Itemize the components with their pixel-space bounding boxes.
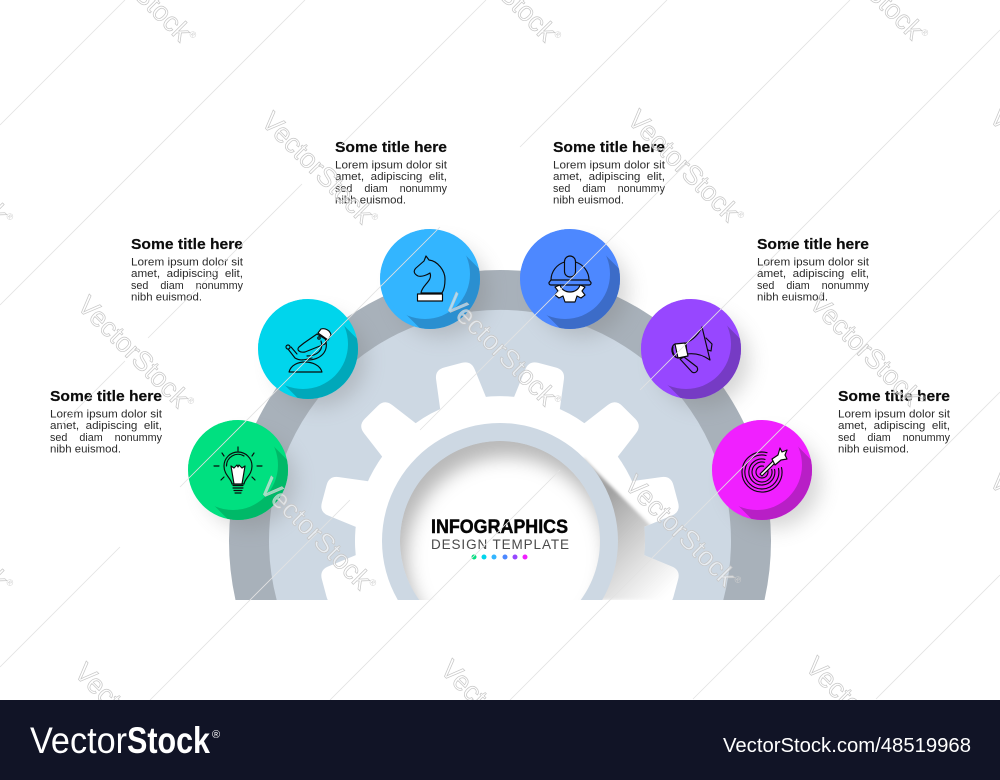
gear semicircle graphic [229, 270, 771, 600]
text block: step 6: amet, adipiscing elit, [838, 420, 950, 432]
text block: step 4: Lorem ipsum dolor sit [553, 160, 665, 172]
text block: step 2: Lorem ipsum dolor sit [131, 256, 243, 268]
text block: step 5 [757, 236, 870, 304]
light gear plate [269, 310, 731, 600]
watermark overlay: ® [187, 29, 199, 41]
watermark overlay: Vector [69, 657, 144, 732]
watermark overlay: ® [917, 393, 929, 405]
text block: step 3: Lorem ipsum dolor sit [335, 160, 447, 172]
watermark overlay: VectorStock [804, 288, 927, 411]
watermark overlay: ® [735, 209, 747, 221]
text block: step 3: amet, adipiscing elit, [335, 171, 447, 183]
text block: step 3: Some title here [335, 139, 447, 156]
watermark overlay: Vector [800, 651, 875, 726]
icon: chess knight [414, 256, 445, 301]
heading: INFOGRAPHICS [431, 517, 568, 538]
text block: step 4: Some title here [553, 139, 665, 156]
icon: hard hat and gear [549, 256, 591, 302]
centre ring [382, 423, 618, 600]
subheading: DESIGN TEMPLATE [431, 537, 569, 552]
text block: step 5: amet, adipiscing elit, [757, 268, 869, 280]
centre white disc with inner shadow [400, 441, 600, 600]
text block: step 1: amet, adipiscing elit, [50, 420, 162, 432]
text block: step 4: sed diam nonummy [553, 183, 666, 195]
watermark overlay: VectorStock [256, 106, 379, 229]
text block: step 1: Lorem ipsum dolor sit [50, 408, 162, 420]
step 6 badge: magenta [712, 420, 820, 528]
text block: step 1: nibh euismod. [50, 444, 121, 456]
watermark overlay: ® [367, 577, 379, 589]
icon: light bulb [214, 447, 262, 493]
watermark overlay: ® [4, 211, 16, 223]
text block: step 2: sed diam nonummy [131, 280, 244, 292]
text block: step 1: sed diam nonummy [50, 432, 163, 444]
centre title [431, 517, 569, 560]
text block: step 3: nibh euismod. [335, 194, 406, 206]
text block: step 6: Lorem ipsum dolor sit [838, 408, 950, 420]
footer logo: Vector [30, 720, 127, 761]
step 3 badge: sky blue [380, 229, 488, 337]
watermark overlay: ® [4, 577, 16, 589]
colour dots [472, 554, 528, 560]
text block: step 2 [131, 236, 244, 304]
text block: step 3 [335, 139, 448, 206]
watermark overlay: ® [552, 393, 564, 405]
icon: megaphone [672, 327, 712, 373]
footer bar [0, 700, 1000, 780]
text block: step 6: Some title here [838, 388, 950, 405]
watermark overlay: ® [732, 574, 744, 586]
step 1 badge: green [188, 420, 296, 528]
text block: step 4: nibh euismod. [553, 194, 624, 206]
watermark overlay: VectorStock [619, 469, 742, 592]
text block: step 5: sed diam nonummy [757, 280, 870, 292]
text block: step 2: nibh euismod. [131, 292, 202, 304]
text block: step 2: Some title here [131, 236, 243, 253]
footer logo [30, 720, 220, 761]
watermark overlay: VectorStock [622, 104, 745, 227]
footer logo: Stock [127, 720, 210, 761]
text block: step 5: nibh euismod. [757, 292, 828, 304]
text block: step 4: amet, adipiscing elit, [553, 171, 665, 183]
watermark overlay: ® [919, 27, 931, 39]
footer logo: ® [212, 729, 220, 741]
text block: step 6 [838, 388, 951, 456]
text block: step 5: Some title here [757, 236, 869, 253]
text block: step 5: Lorem ipsum dolor sit [757, 256, 869, 268]
text block: step 3: sed diam nonummy [335, 183, 448, 195]
step 2 badge: cyan [258, 299, 366, 407]
watermark overlay: ® [552, 29, 564, 41]
watermark overlay: VectorStock [254, 472, 377, 595]
watermark overlay: VectorStock [72, 290, 195, 413]
text block: step 6: sed diam nonummy [838, 432, 951, 444]
text block: step 1: Some title here [50, 388, 162, 405]
white gear cutout [318, 359, 682, 611]
text block: step 4 [553, 139, 666, 206]
icon: microscope [286, 329, 331, 372]
text block: step 6: nibh euismod. [838, 444, 909, 456]
outer grey ring [229, 270, 771, 600]
footer image id: VectorStock.com/48519968 [723, 735, 971, 757]
step 4 badge: blue [520, 229, 628, 337]
text block: step 1 [50, 388, 163, 456]
watermark overlay: VectorStock [439, 288, 562, 411]
icon: target with dart [742, 448, 787, 492]
watermark overlay: Vector [435, 654, 510, 729]
step 5 badge: purple [641, 299, 749, 407]
watermark overlay: ® [369, 211, 381, 223]
text block: step 2: amet, adipiscing elit, [131, 268, 243, 280]
long shadow of centre ring [584, 458, 676, 600]
watermark overlay: ® [185, 395, 197, 407]
